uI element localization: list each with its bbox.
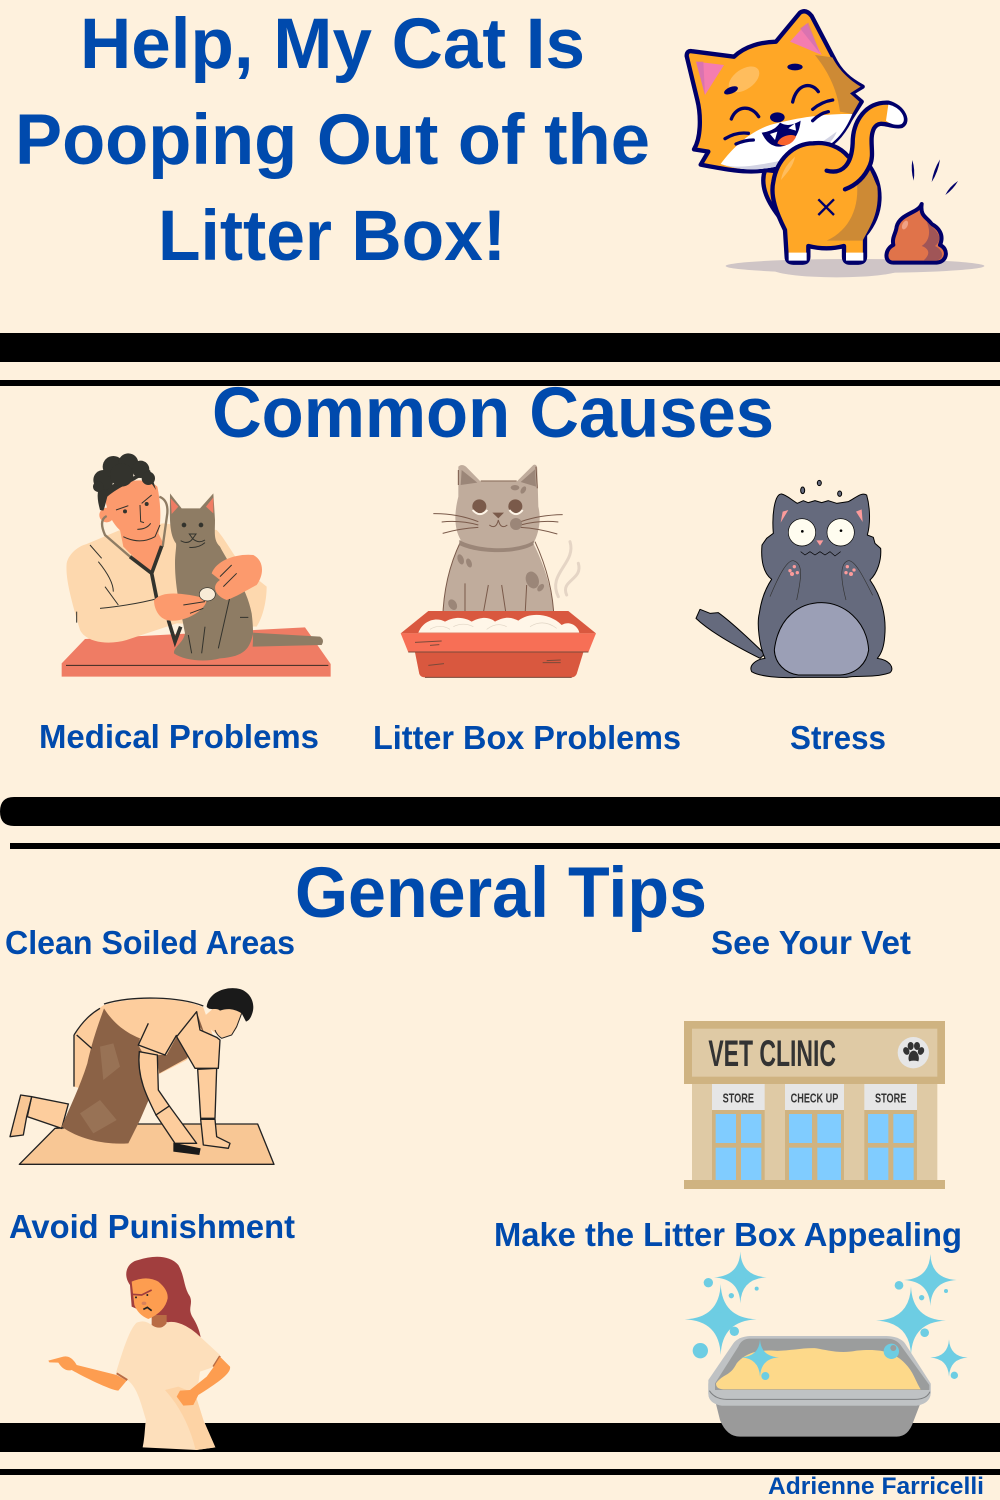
title: Help, My Cat Is xyxy=(80,5,585,84)
smell lines xyxy=(556,542,579,597)
ground shadow xyxy=(726,259,984,277)
heading: general tips: General Tips xyxy=(295,854,707,933)
stethoscope xyxy=(102,497,167,557)
building base xyxy=(684,1180,945,1189)
icon: paw xyxy=(898,1037,929,1068)
cat in litter box xyxy=(433,465,563,620)
sparkles and bubbles xyxy=(685,1251,968,1379)
label: litter box problems: Litter Box Problems xyxy=(373,719,681,756)
litter tray xyxy=(708,1336,931,1437)
torso and hip xyxy=(74,999,213,1090)
cat head xyxy=(687,11,863,171)
vet xyxy=(66,453,267,643)
label: clean soiled areas: Clean Soiled Areas xyxy=(5,924,295,961)
motion marks xyxy=(912,159,958,195)
stressed cat xyxy=(696,480,892,678)
lower leg and sandal xyxy=(27,1097,68,1128)
arms xyxy=(48,1356,230,1406)
middle door: check up xyxy=(785,1084,844,1180)
head xyxy=(132,1278,168,1328)
grey cat xyxy=(170,493,323,660)
near arm xyxy=(138,1023,177,1055)
heading: common causes: Common Causes xyxy=(212,374,774,453)
clinic sign xyxy=(684,1021,945,1084)
far arm xyxy=(177,1012,230,1148)
sparkles on tray xyxy=(741,1339,899,1380)
label: avoid punishment: Avoid Punishment xyxy=(9,1208,295,1245)
illustration: angry woman pointing xyxy=(48,1257,230,1450)
scrub brush xyxy=(173,1143,201,1155)
title: Pooping Out of the xyxy=(15,101,650,180)
label: make the litter box appealing: Make the Litter Box Appealing xyxy=(494,1216,962,1253)
cat front leg behind head xyxy=(763,170,797,220)
illustration: cat with poop xyxy=(687,11,984,277)
kneeling figure xyxy=(10,988,253,1155)
cat tail xyxy=(827,103,905,189)
hair xyxy=(126,1257,201,1337)
apron xyxy=(62,1008,157,1144)
label: stress: Stress xyxy=(790,719,886,756)
title xyxy=(15,5,650,276)
credit: Adrienne Farricelli xyxy=(768,1473,984,1500)
left store xyxy=(712,1084,765,1180)
litter box xyxy=(401,611,596,677)
curly hair xyxy=(93,453,156,511)
mouth xyxy=(762,121,801,147)
shirt xyxy=(116,1321,220,1450)
illustration: vet clinic building xyxy=(684,1021,945,1189)
label: medical problems: Medical Problems xyxy=(39,718,319,755)
exam table xyxy=(62,627,331,677)
middle door: check up: CHECK UP xyxy=(791,1091,838,1106)
left store: STORE xyxy=(723,1091,754,1106)
illustration: cat in litter box and stressed cat xyxy=(401,465,892,678)
cat rump and legs xyxy=(772,143,879,263)
clinic sign: VET CLINIC xyxy=(708,1032,836,1074)
illustration: clean litter box with sparkles xyxy=(685,1251,968,1437)
illustration: vet examining cat xyxy=(62,453,331,677)
label: see your vet: See Your Vet xyxy=(711,924,911,961)
title: Litter Box! xyxy=(158,197,506,276)
poop xyxy=(886,204,946,263)
right store: STORE xyxy=(875,1091,906,1106)
vet hands xyxy=(154,555,262,621)
mat xyxy=(19,1124,274,1164)
building wall xyxy=(692,1083,937,1182)
head xyxy=(200,1007,242,1038)
right store xyxy=(864,1084,917,1180)
illustration: man scrubbing floor xyxy=(10,988,274,1164)
